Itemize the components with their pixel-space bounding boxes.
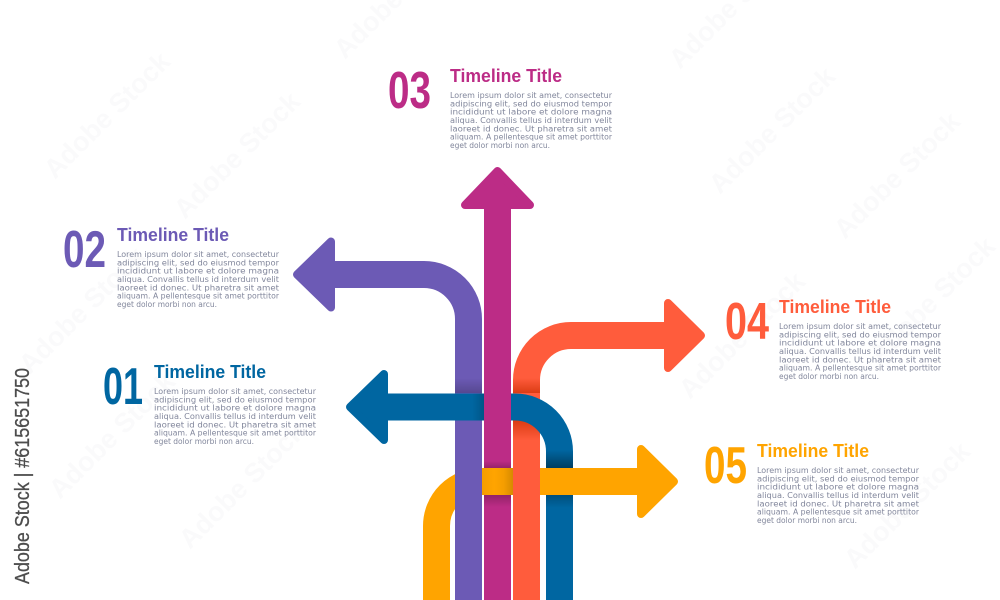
title 01: Timeline Title (154, 362, 266, 382)
body 04: adipiscing elit, sed do eiusmod tempor (779, 329, 942, 339)
body 03: Lorem ipsum dolor sit amet, consectetur (450, 90, 613, 100)
arrow 05 base curve: yellow (436, 482, 490, 600)
body 01 (154, 386, 317, 446)
number 05: 05 (704, 437, 747, 495)
body 02: eget dolor morbi non arcu. (117, 299, 217, 309)
body 01: Lorem ipsum dolor sit amet, consectetur (154, 386, 317, 396)
body 01: eget dolor morbi non arcu. (154, 436, 254, 446)
arrow 02: purple (297, 242, 482, 600)
body 05: aliquam. A pellentesque sit amet porttitor (757, 507, 920, 517)
arrow 04: orange red (513, 303, 701, 600)
block 05 (704, 437, 920, 525)
watermark pattern: Adobe Stock (703, 61, 842, 199)
body 04: Lorem ipsum dolor sit amet, consectetur (779, 321, 942, 331)
body 04: aliquam. A pellentesque sit amet porttitor (779, 363, 942, 373)
body 03: incididunt ut labore et dolore magna (450, 107, 612, 117)
body 05 (757, 465, 920, 525)
arrow 05: yellow crossing and head (482, 449, 674, 514)
body 05: incididunt ut labore et dolore magna (757, 482, 919, 492)
watermark pattern: Adobe Stock (168, 86, 307, 224)
body 02: Lorem ipsum dolor sit amet, consectetur (117, 249, 280, 259)
watermark pattern: Adobe Stock (863, 231, 1000, 369)
body 03 (450, 90, 613, 150)
body 05: Lorem ipsum dolor sit amet, consectetur (757, 465, 920, 475)
title 03: Timeline Title (450, 66, 562, 86)
body 04 (779, 321, 942, 381)
arrow 03: magenta (465, 171, 530, 600)
number 04: 04 (725, 293, 769, 351)
body 04: eget dolor morbi non arcu. (779, 371, 879, 381)
watermark pattern: Adobe Stock (38, 46, 177, 184)
watermark pattern: Adobe Stock (673, 266, 812, 404)
body 01: laoreet id donec. Ut pharetra sit amet (154, 419, 317, 429)
watermark pattern: Adobe Stock (43, 366, 182, 504)
block 03 (388, 62, 613, 150)
number 03: 03 (388, 62, 431, 120)
body 05: eget dolor morbi non arcu. (757, 515, 857, 525)
title 04: Timeline Title (779, 297, 891, 317)
body 01: incididunt ut labore et dolore magna (154, 403, 316, 413)
body 03: aliqua. Convallis tellus id interdum velit (450, 115, 613, 125)
block 04 (725, 293, 942, 381)
watermark pattern: Adobe Stock (838, 436, 977, 574)
body 05: adipiscing elit, sed do eiusmod tempor (757, 473, 920, 483)
watermark pattern: Adobe Stock (173, 416, 312, 554)
number 01: 01 (103, 358, 143, 416)
number 02: 02 (63, 221, 106, 279)
watermark pattern: Adobe Stock (828, 106, 967, 244)
body 02: laoreet id donec. Ut pharetra sit amet (117, 282, 280, 292)
block 02 (63, 221, 280, 309)
watermark pattern: Adobe Stock (13, 241, 152, 379)
body 02: aliqua. Convallis tellus id interdum velit (117, 274, 280, 284)
body 02: incididunt ut labore et dolore magna (117, 266, 279, 276)
body 03: eget dolor morbi non arcu. (450, 140, 550, 150)
adobe stock side label: Adobe Stock | #615651750 (12, 368, 34, 584)
body 02 (117, 249, 280, 309)
body 05: aliqua. Convallis tellus id interdum velit (757, 490, 920, 500)
title 05: Timeline Title (757, 441, 869, 461)
body 04: laoreet id donec. Ut pharetra sit amet (779, 354, 942, 364)
block 01 (103, 358, 317, 446)
title 02: Timeline Title (117, 225, 229, 245)
body 02: aliquam. A pellentesque sit amet porttitor (117, 291, 280, 301)
arrow 01: blue (350, 374, 573, 600)
body 01: aliqua. Convallis tellus id interdum velit (154, 411, 317, 421)
body 03: adipiscing elit, sed do eiusmod tempor (450, 98, 613, 108)
body 04: aliqua. Convallis tellus id interdum velit (779, 346, 942, 356)
body 05: laoreet id donec. Ut pharetra sit amet (757, 498, 920, 508)
body 03: laoreet id donec. Ut pharetra sit amet (450, 123, 613, 133)
body 03: aliquam. A pellentesque sit amet porttitor (450, 132, 613, 142)
body 04: incididunt ut labore et dolore magna (779, 338, 941, 348)
body 01: adipiscing elit, sed do eiusmod tempor (154, 394, 317, 404)
body 01: aliquam. A pellentesque sit amet porttitor (154, 428, 317, 438)
body 02: adipiscing elit, sed do eiusmod tempor (117, 257, 280, 267)
arrow diagram (297, 171, 701, 600)
